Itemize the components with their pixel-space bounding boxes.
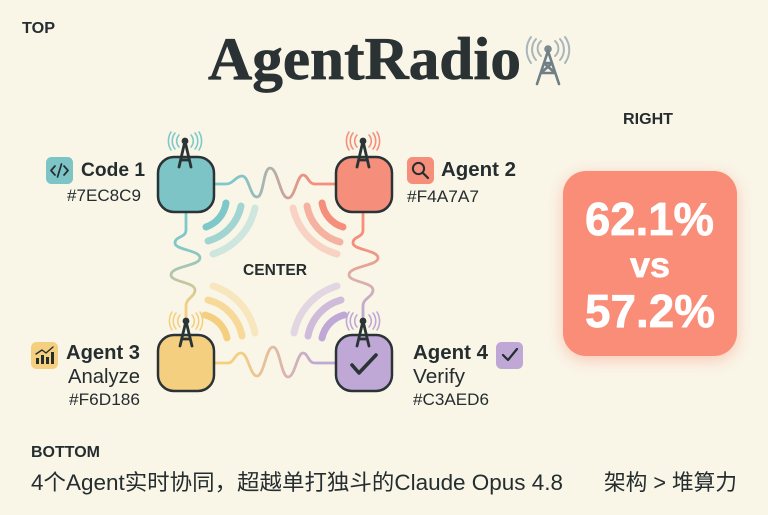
icon: radio tower — [527, 37, 569, 84]
hex code: #F4A7A7 — [407, 187, 479, 206]
icon: code — [46, 157, 73, 184]
label: RIGHT: RIGHT — [623, 111, 673, 128]
icon: check mark — [352, 355, 376, 373]
role: Verify — [413, 366, 465, 388]
icon: check box — [496, 342, 523, 369]
role: Analyze — [68, 366, 140, 388]
legend: Code 1 — [46, 157, 145, 205]
legend: Agent 3 — [31, 342, 140, 409]
text: vs: vs — [630, 246, 670, 285]
signal arcs: salmon — [293, 203, 343, 254]
label: BOTTOM: BOTTOM — [31, 444, 100, 461]
agent name: Code 1 — [81, 159, 145, 181]
antenna: Agent 4 — [346, 312, 380, 346]
agent name: Agent 2 — [441, 158, 516, 181]
label: CENTER: CENTER — [243, 262, 307, 279]
signal arcs: yellow — [205, 286, 255, 338]
signal arcs: purple — [294, 286, 344, 338]
node: Code 1 — [158, 132, 214, 212]
wire: Code 1 to Agent 3 — [171, 212, 200, 322]
icon: chart — [31, 342, 58, 369]
wire: Agent 2 to Agent 4 — [349, 212, 378, 322]
agent name: Agent 4 — [413, 341, 489, 364]
antenna: Code 1 — [168, 132, 202, 167]
node: Agent 4 — [336, 312, 392, 391]
label: TOP: TOP — [22, 20, 55, 37]
hex code: #7EC8C9 — [67, 186, 141, 205]
signal arcs: teal — [206, 203, 255, 254]
node: Agent 2 — [336, 132, 392, 212]
caption: main message: 4个Agent实时协同，超越单打独斗的Claude Opus 4.8 — [31, 470, 563, 495]
stat: 57.2%: 57.2% — [585, 285, 715, 337]
agent name: Agent 3 — [66, 342, 140, 364]
antenna: Agent 2 — [346, 132, 380, 167]
caption: takeaway: 架构 > 堆算力 — [604, 470, 737, 495]
wire: Agent 3 to Agent 4 — [214, 347, 336, 377]
hex code: #F6D186 — [69, 390, 140, 409]
hex code: #C3AED6 — [413, 390, 489, 409]
stat: 62.1%: 62.1% — [585, 193, 714, 245]
node: Agent 3 — [158, 312, 214, 391]
icon: magnifier — [407, 157, 434, 184]
panel: comparison stat — [563, 171, 737, 360]
legend: Agent 2 — [407, 157, 516, 206]
antenna: Agent 3 — [169, 312, 203, 346]
title: AgentRadio — [208, 26, 521, 92]
legend: Agent 4 — [413, 341, 523, 409]
wire: Code 1 to Agent 2 — [214, 168, 336, 198]
